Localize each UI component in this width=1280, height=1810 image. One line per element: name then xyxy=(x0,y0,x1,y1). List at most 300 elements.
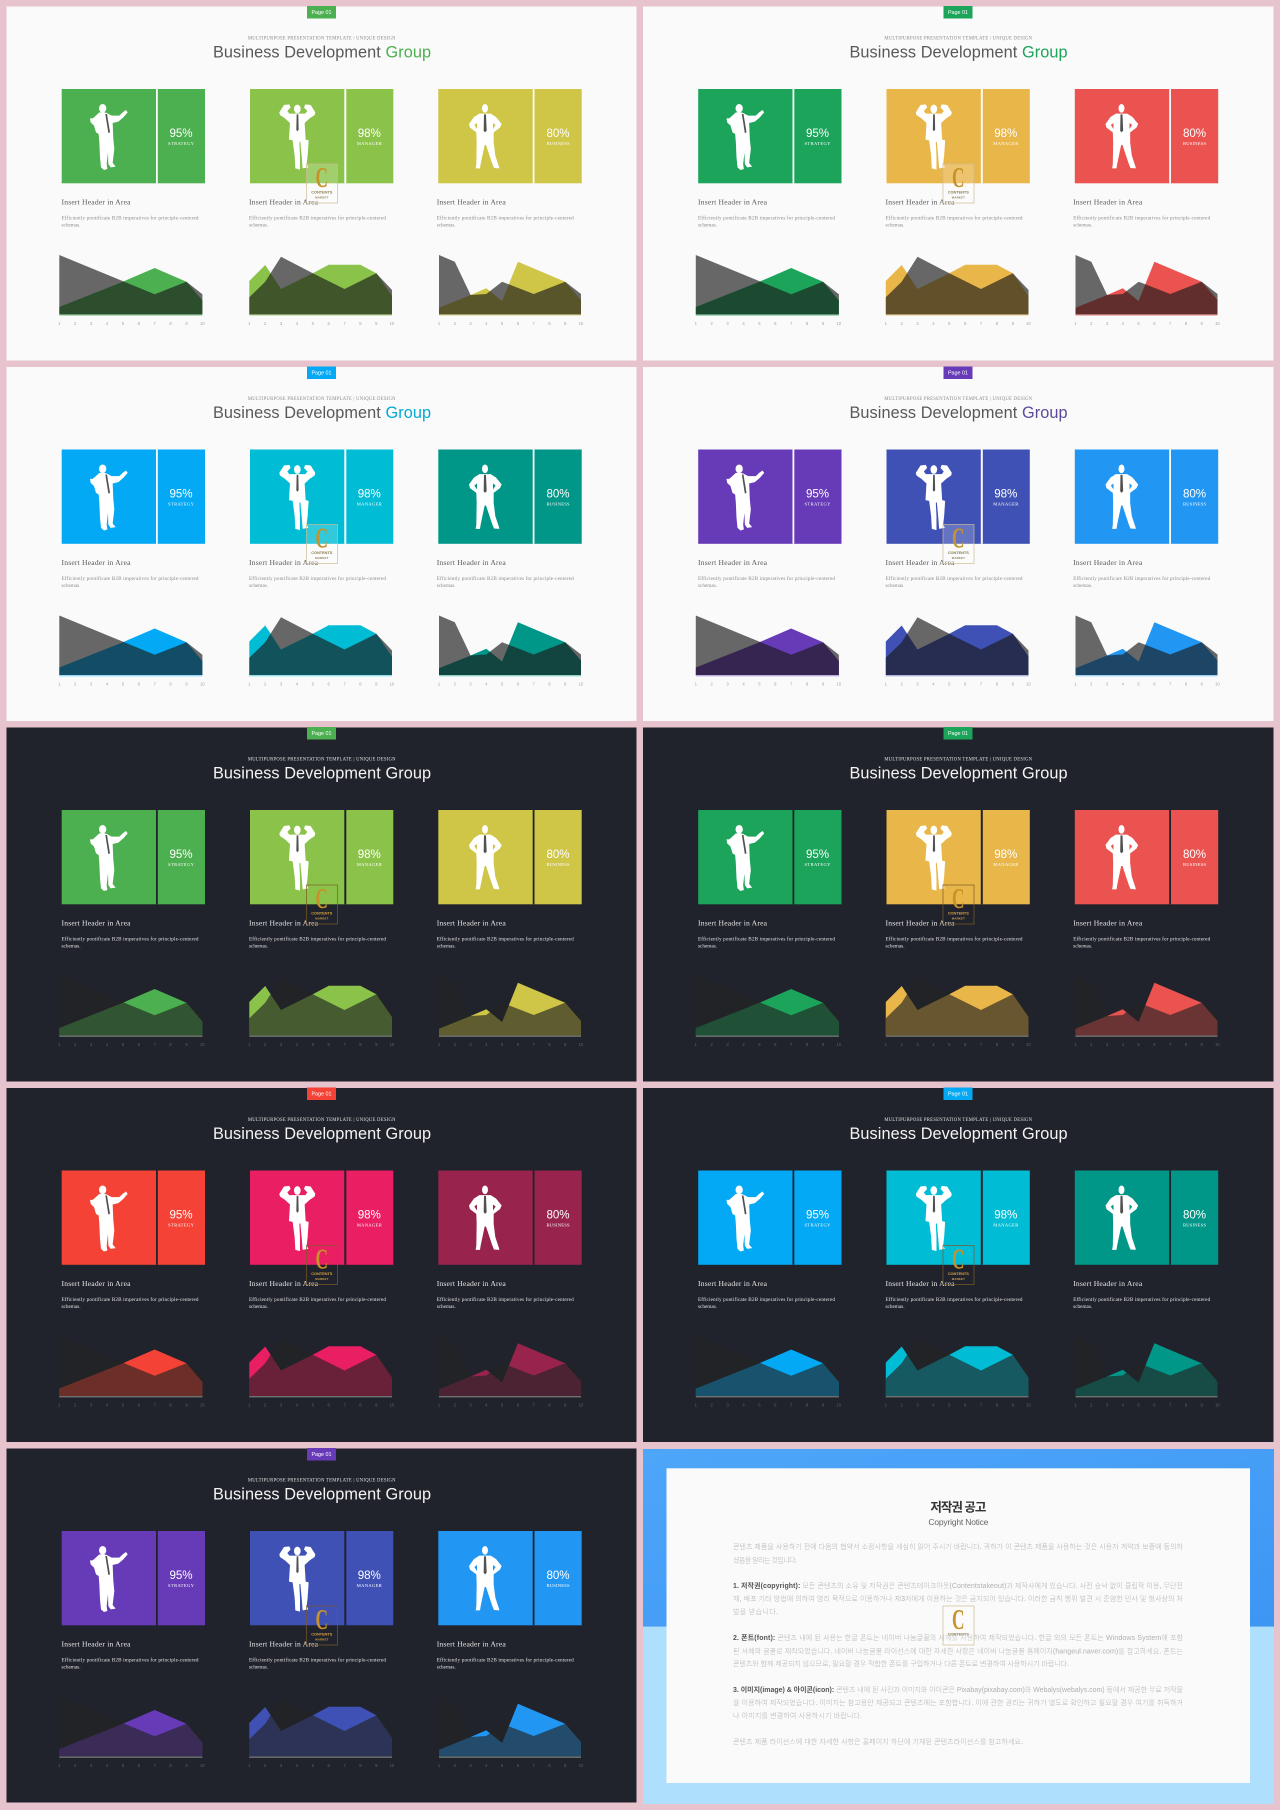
body text xyxy=(886,214,1023,229)
body text: Efficiently pontificate B2B imperatives for principle-centered xyxy=(249,1296,386,1303)
heading: Insert Header in Area xyxy=(437,918,506,928)
notice subheading: Copyright Notice xyxy=(928,1517,989,1527)
card: business: BUSINESS xyxy=(1183,141,1206,146)
card: manager: 98% xyxy=(358,1208,381,1221)
card: manager: 98% xyxy=(994,127,1017,140)
area chart xyxy=(59,1336,202,1397)
notice section: font: 콘텐츠와 함께 제공되지 않으므로, 필요할 경우 적합한 폰트를 구입하거나 다른 폰트로 변경하여 사용하시기 바랍니다. xyxy=(733,1659,1069,1668)
notice footer line: 콘텐츠 제품 라이선스에 대한 자세한 사항은 홈페이지 하단에 기재된 콘텐츠라이선스를 참고하세요. xyxy=(733,1737,1023,1746)
heading: Insert Header in Area xyxy=(437,198,506,206)
axis labels: 12345678910 xyxy=(248,321,395,326)
card: manager xyxy=(250,1531,393,1625)
area chart xyxy=(59,255,202,316)
area chart xyxy=(439,1336,581,1397)
card: business: 80% xyxy=(546,127,570,140)
panel: light emerald xyxy=(643,6,1274,360)
body text xyxy=(886,575,1023,589)
body text: Efficiently pontificate B2B imperatives for principle-centered xyxy=(886,936,1023,942)
column: strategy xyxy=(58,810,205,1047)
card: strategy: STRATEGY xyxy=(168,141,195,146)
card: business: 80% xyxy=(546,487,570,500)
title: Business Development Group xyxy=(213,1125,431,1143)
axis labels: 12345678910 xyxy=(1074,1042,1220,1047)
body text xyxy=(62,214,199,229)
area chart xyxy=(59,976,202,1037)
column: business xyxy=(437,1170,584,1408)
axis labels: 12345678910 xyxy=(695,1402,842,1408)
card: manager xyxy=(886,450,1030,544)
body text xyxy=(62,575,199,589)
column: strategy xyxy=(695,450,842,686)
title: Business Development Group xyxy=(850,43,1068,61)
area chart xyxy=(59,616,202,676)
body text: Efficiently pontificate B2B imperatives for principle-centered xyxy=(62,1656,199,1664)
card: strategy: 95% xyxy=(806,1208,829,1221)
subtitle: MULTIPURPOSE PRESENTATION TEMPLATE | UNIQUE DESIGN xyxy=(884,1118,1033,1123)
body text: schemas. xyxy=(698,1304,717,1310)
heading: Insert Header in Area xyxy=(249,198,319,206)
watermark: C xyxy=(952,1244,965,1276)
card: business xyxy=(438,810,582,904)
column: business xyxy=(437,1531,584,1768)
column: manager xyxy=(885,89,1031,326)
column: strategy xyxy=(58,89,205,326)
watermark xyxy=(943,162,974,203)
area chart xyxy=(439,255,581,316)
body text: Efficiently pontificate B2B imperatives for principle-centered xyxy=(886,1296,1023,1303)
body text: schemas. xyxy=(62,1304,80,1310)
notice section: image and icon xyxy=(733,1685,1184,1720)
card: business: BUSINESS xyxy=(546,1583,570,1588)
panel: light green xyxy=(6,6,636,360)
body text: Efficiently pontificate B2B imperatives for principle-centered xyxy=(437,575,574,582)
watermark: C xyxy=(952,1604,965,1636)
card: manager: 98% xyxy=(358,1569,381,1582)
body text: Efficiently pontificate B2B imperatives for principle-centered xyxy=(62,1296,199,1303)
card: strategy: STRATEGY xyxy=(168,1222,195,1228)
area chart xyxy=(1076,1336,1218,1397)
watermark xyxy=(306,162,338,203)
body text xyxy=(886,1296,1023,1310)
area chart xyxy=(249,978,392,1037)
axis labels: 12345678910 xyxy=(248,682,395,686)
card: business xyxy=(1075,810,1218,904)
column: manager xyxy=(885,450,1031,686)
body text: schemas. xyxy=(249,1665,268,1671)
card: business xyxy=(438,450,582,544)
body text xyxy=(437,575,574,589)
body text: Efficiently pontificate B2B imperatives for principle-centered xyxy=(249,1656,386,1664)
subtitle: MULTIPURPOSE PRESENTATION TEMPLATE | UNIQUE DESIGN xyxy=(248,1479,396,1484)
page badge xyxy=(944,727,972,740)
body text xyxy=(437,936,574,950)
watermark: CONTENTS xyxy=(311,1632,333,1636)
notice section: font: 2. 폰트(font): 콘텐츠 내에 된 사용는 한글 폰트는 네이버 나눔글꼴의 서체를 사용하여 제작되었습니다. 한글 외의 모든 폰트는 Windows System에 포함 xyxy=(733,1633,1184,1642)
heading: Insert Header in Area xyxy=(62,558,131,567)
title: Business Development Group xyxy=(850,764,1068,782)
body text: Efficiently pontificate B2B imperatives for principle-centered xyxy=(437,214,574,222)
column: manager xyxy=(248,1170,395,1408)
card: strategy: STRATEGY xyxy=(804,141,831,146)
body text: schemas. xyxy=(1073,583,1092,589)
axis labels: 12345678910 xyxy=(885,682,1031,686)
heading: Insert Header in Area xyxy=(698,1279,768,1288)
axis labels: 12345678910 xyxy=(58,1763,205,1768)
body text xyxy=(437,1296,574,1310)
column: strategy xyxy=(695,810,842,1047)
notice intro xyxy=(733,1542,1184,1564)
body text: Efficiently pontificate B2B imperatives for principle-centered xyxy=(437,936,574,942)
body text: Efficiently pontificate B2B imperatives for principle-centered xyxy=(62,214,199,222)
heading: Insert Header in Area xyxy=(886,558,955,567)
body text: Efficiently pontificate B2B imperatives for principle-centered xyxy=(62,575,199,582)
panel: copyright notice xyxy=(643,1449,1274,1804)
body text xyxy=(249,214,386,229)
card: manager: 98% xyxy=(994,487,1017,500)
area chart xyxy=(886,257,1028,316)
heading: Insert Header in Area xyxy=(886,918,955,928)
watermark: C xyxy=(316,162,328,194)
column: business xyxy=(437,89,584,326)
watermark xyxy=(306,883,338,924)
page badge xyxy=(944,6,972,18)
card: manager: MANAGER xyxy=(993,862,1019,867)
page badge xyxy=(307,1448,336,1460)
heading: Insert Header in Area xyxy=(437,1279,506,1288)
card: manager: MANAGER xyxy=(357,141,383,146)
body text: Efficiently pontificate B2B imperatives for principle-centered xyxy=(698,1296,835,1303)
watermark: CONTENTS xyxy=(948,1271,969,1276)
card: business: 80% xyxy=(1183,1208,1206,1221)
heading: Insert Header in Area xyxy=(62,1640,131,1648)
card: strategy: STRATEGY xyxy=(168,502,195,506)
axis labels: 12345678910 xyxy=(438,682,584,686)
card: manager: 98% xyxy=(358,127,381,140)
page badge: Page 01 xyxy=(948,370,968,376)
panel: light purple xyxy=(643,366,1274,721)
heading: Insert Header in Area xyxy=(437,1640,506,1648)
page badge: Page 01 xyxy=(311,1452,332,1458)
notice intro: 콘텐츠 제품을 사용하기 전에 다음의 협약서 소정사항을 세심히 읽어 주시기 바랍니다. 귀하가 이 콘텐츠 제품을 사용하는 것은 사용자 계약과 보증에 동의하 xyxy=(733,1542,1184,1551)
body text xyxy=(249,1656,386,1671)
body text: Efficiently pontificate B2B imperatives for principle-centered xyxy=(62,936,199,942)
subtitle: MULTIPURPOSE PRESENTATION TEMPLATE | UNIQUE DESIGN xyxy=(248,37,396,42)
heading: Insert Header in Area xyxy=(698,918,768,928)
heading: Insert Header in Area xyxy=(1073,558,1143,567)
column: business xyxy=(1073,1170,1220,1408)
card: business: 80% xyxy=(546,848,570,861)
card: manager xyxy=(250,450,393,544)
card: manager xyxy=(250,1170,393,1265)
body text: schemas. xyxy=(1073,944,1092,950)
panel: dark emerald xyxy=(643,727,1274,1082)
card: business: BUSINESS xyxy=(546,862,570,867)
watermark xyxy=(943,522,974,564)
body text: Efficiently pontificate B2B imperatives for principle-centered xyxy=(698,936,835,942)
title: Business Development Group xyxy=(213,43,431,61)
watermark: C xyxy=(316,883,328,915)
watermark xyxy=(943,1604,974,1645)
body text: schemas. xyxy=(886,944,904,950)
column: strategy xyxy=(695,89,842,326)
card: business xyxy=(438,1531,582,1625)
card: business: BUSINESS xyxy=(546,141,570,146)
watermark: C xyxy=(316,1604,328,1636)
watermark xyxy=(306,1604,338,1645)
watermark: MARKET xyxy=(952,556,965,560)
card: manager: MANAGER xyxy=(357,502,383,506)
notice section: image and icon: 3. 이미지(image) & 아이콘(icon): 콘텐츠 내에 된 사진과 이미지와 아이콘은 Pixabay(pixabay.com)와 Webalys(webalys.com) 등에서 제공한 무료 저작물 xyxy=(733,1685,1184,1694)
body text: schemas. xyxy=(1073,1304,1092,1310)
area chart xyxy=(1076,976,1218,1037)
axis labels: 12345678910 xyxy=(1074,1402,1220,1408)
page badge xyxy=(307,1088,336,1100)
axis labels: 12345678910 xyxy=(438,1042,584,1047)
watermark: CONTENTS xyxy=(311,910,333,916)
axis labels: 12345678910 xyxy=(695,321,842,326)
area chart xyxy=(249,1699,392,1758)
card: business xyxy=(1075,1170,1218,1265)
body text: Efficiently pontificate B2B imperatives for principle-centered xyxy=(249,936,386,942)
body text: Efficiently pontificate B2B imperatives for principle-centered xyxy=(698,575,835,582)
column: manager xyxy=(248,1531,395,1768)
card: manager xyxy=(886,810,1030,904)
notice intro: 셨음을 알리는 것입니다. xyxy=(733,1556,797,1564)
heading: Insert Header in Area xyxy=(1073,198,1143,206)
column: business xyxy=(1073,89,1220,326)
card: business xyxy=(1075,89,1218,183)
body text xyxy=(698,575,835,589)
watermark: MARKET xyxy=(952,916,965,920)
body text: schemas. xyxy=(1073,223,1092,229)
axis labels: 12345678910 xyxy=(885,1402,1031,1408)
card: business: BUSINESS xyxy=(1183,862,1206,867)
area chart xyxy=(886,1338,1028,1397)
watermark xyxy=(943,883,974,924)
body text xyxy=(249,936,386,950)
card: strategy xyxy=(62,89,205,183)
card: strategy: 95% xyxy=(170,127,192,140)
body text: Efficiently pontificate B2B imperatives for principle-centered xyxy=(249,214,386,222)
body text: Efficiently pontificate B2B imperatives for principle-centered xyxy=(886,214,1023,222)
watermark: C xyxy=(952,883,965,915)
card: manager: MANAGER xyxy=(993,502,1019,506)
watermark xyxy=(306,522,338,564)
body text xyxy=(698,936,835,950)
body text: schemas. xyxy=(437,583,456,589)
body text: Efficiently pontificate B2B imperatives for principle-centered xyxy=(437,1296,574,1303)
axis labels: 12345678910 xyxy=(438,321,584,326)
notice section: image and icon: 나 이미지를 변경하여 사용하시기 바랍니다. xyxy=(733,1711,862,1720)
notice section: font xyxy=(733,1633,1184,1668)
column: business xyxy=(437,450,584,686)
heading: Insert Header in Area xyxy=(249,558,319,567)
watermark: MARKET xyxy=(315,1638,329,1642)
heading: Insert Header in Area xyxy=(62,1279,131,1288)
area chart xyxy=(696,1336,839,1397)
axis labels: 12345678910 xyxy=(248,1042,395,1047)
body text: schemas. xyxy=(437,1665,456,1671)
subtitle: MULTIPURPOSE PRESENTATION TEMPLATE | UNIQUE DESIGN xyxy=(248,397,396,402)
page badge xyxy=(307,727,336,740)
body text: Efficiently pontificate B2B imperatives for principle-centered xyxy=(249,575,386,582)
title: Business Development Group xyxy=(213,764,431,782)
card: manager: 98% xyxy=(994,1208,1017,1221)
heading: Insert Header in Area xyxy=(886,1279,955,1288)
body text: schemas. xyxy=(698,583,717,589)
card: business: 80% xyxy=(1183,127,1206,140)
watermark: CONTENTS xyxy=(948,910,969,916)
body text xyxy=(886,936,1023,950)
card: strategy: STRATEGY xyxy=(804,1222,831,1228)
area chart xyxy=(696,255,839,316)
axis labels: 12345678910 xyxy=(1074,682,1220,686)
card: business: 80% xyxy=(1183,848,1206,861)
card: strategy: 95% xyxy=(806,848,829,861)
subtitle: MULTIPURPOSE PRESENTATION TEMPLATE | UNIQUE DESIGN xyxy=(884,397,1033,402)
body text xyxy=(1073,936,1211,950)
card: manager: MANAGER xyxy=(993,141,1019,146)
area chart xyxy=(696,976,839,1037)
column: manager xyxy=(248,89,395,326)
watermark: MARKET xyxy=(315,556,329,560)
body text xyxy=(1073,1296,1211,1310)
body text: schemas. xyxy=(62,583,80,589)
notice heading: 저작권 공고 xyxy=(930,1500,986,1514)
card: manager: 98% xyxy=(994,848,1017,861)
card: strategy: 95% xyxy=(170,848,192,861)
area chart xyxy=(886,978,1028,1037)
card: business: BUSINESS xyxy=(1183,502,1206,506)
notice section: copyright: 1. 저작권(copyright): 모든 콘텐츠의 소유 및 저작권은 콘텐츠테이크아웃(Contentstakeout)과 제작사에게 있습니다. 사전 승낙 없이 클립작 이용, 무단전 xyxy=(733,1581,1183,1590)
body text xyxy=(62,1296,199,1310)
column: manager xyxy=(248,450,395,686)
body text: schemas. xyxy=(886,1304,904,1310)
card: business: 80% xyxy=(1183,487,1206,500)
watermark: CONTENTS xyxy=(311,550,333,555)
body text: schemas. xyxy=(886,223,904,229)
watermark xyxy=(306,1244,338,1284)
page badge xyxy=(307,6,336,18)
body text: schemas. xyxy=(249,1304,268,1310)
axis labels: 12345678910 xyxy=(58,1042,205,1047)
heading: Insert Header in Area xyxy=(437,558,506,567)
body text: schemas. xyxy=(437,1304,456,1310)
body text xyxy=(62,936,199,950)
card: strategy xyxy=(698,1170,842,1265)
card: business: BUSINESS xyxy=(1183,1222,1206,1228)
subtitle: MULTIPURPOSE PRESENTATION TEMPLATE | UNIQUE DESIGN xyxy=(884,37,1033,42)
axis labels: 12345678910 xyxy=(58,321,205,326)
heading: Insert Header in Area xyxy=(249,1279,319,1288)
area chart xyxy=(249,1338,392,1397)
body text: schemas. xyxy=(62,223,80,229)
card: business: 80% xyxy=(546,1208,570,1221)
card: strategy: STRATEGY xyxy=(804,862,831,867)
subtitle: MULTIPURPOSE PRESENTATION TEMPLATE | UNIQUE DESIGN xyxy=(884,758,1033,763)
notice section: image and icon: 을 이용하여 제작되었습니다. 이미지는 참고용만 제공되고 콘텐츠에는 포함합니다. 이에 관한 권리는 귀하가 별도로 확인하고 필요할 경우 여기를 취득하거 xyxy=(733,1698,1183,1707)
heading: Insert Header in Area xyxy=(62,918,131,928)
body text xyxy=(1073,214,1211,229)
area chart xyxy=(439,1697,581,1758)
card: business: BUSINESS xyxy=(546,1222,570,1228)
body text xyxy=(1073,575,1211,589)
body text: schemas. xyxy=(437,944,456,950)
body text xyxy=(62,1656,199,1671)
watermark: CONTENTS xyxy=(948,1632,969,1636)
body text xyxy=(698,214,835,229)
heading: Insert Header in Area xyxy=(249,1640,319,1648)
card: manager xyxy=(886,1170,1030,1265)
subtitle: MULTIPURPOSE PRESENTATION TEMPLATE | UNIQUE DESIGN xyxy=(248,1118,396,1123)
page badge: Page 01 xyxy=(311,370,332,376)
card: strategy xyxy=(698,810,842,904)
heading: Insert Header in Area xyxy=(698,198,768,206)
subtitle: MULTIPURPOSE PRESENTATION TEMPLATE | UNIQUE DESIGN xyxy=(248,758,396,763)
area chart xyxy=(886,617,1028,676)
axis labels: 12345678910 xyxy=(438,1402,584,1408)
card: strategy: 95% xyxy=(806,487,829,500)
page badge xyxy=(307,366,336,379)
axis labels: 12345678910 xyxy=(438,1763,584,1768)
panel: dark red xyxy=(6,1088,636,1442)
card: strategy xyxy=(62,1531,205,1625)
body text: schemas. xyxy=(62,944,80,950)
card: manager: MANAGER xyxy=(357,1583,383,1588)
card: manager xyxy=(886,89,1030,183)
axis labels: 12345678910 xyxy=(58,1402,205,1408)
watermark: CONTENTS xyxy=(948,190,969,194)
heading: Insert Header in Area xyxy=(62,198,131,206)
card: manager: 98% xyxy=(358,848,381,861)
axis labels: 12345678910 xyxy=(695,682,842,686)
panel: light blue xyxy=(6,366,636,721)
card: strategy xyxy=(62,810,205,904)
card: strategy: STRATEGY xyxy=(804,502,831,506)
column: business xyxy=(1073,450,1220,686)
card: manager: MANAGER xyxy=(357,862,383,867)
column: manager xyxy=(885,810,1031,1047)
watermark: MARKET xyxy=(315,196,329,200)
body text xyxy=(437,1656,574,1671)
column: manager xyxy=(248,810,395,1047)
card: manager: MANAGER xyxy=(357,1222,383,1228)
area chart xyxy=(249,617,392,676)
body text: schemas. xyxy=(698,944,717,950)
column: business xyxy=(437,810,584,1047)
heading: Insert Header in Area xyxy=(698,558,768,567)
heading: Insert Header in Area xyxy=(1073,1279,1143,1288)
watermark: C xyxy=(316,522,328,554)
watermark: MARKET xyxy=(952,1277,965,1281)
body text: Efficiently pontificate B2B imperatives for principle-centered xyxy=(698,214,835,222)
card: strategy: 95% xyxy=(170,487,192,500)
body text: schemas. xyxy=(437,223,456,229)
page badge: Page 01 xyxy=(948,1092,968,1098)
body text xyxy=(249,575,386,589)
card: strategy xyxy=(62,1170,205,1265)
card: strategy: STRATEGY xyxy=(168,862,195,867)
column: strategy xyxy=(58,450,205,686)
area chart xyxy=(1076,616,1218,676)
card: strategy: 95% xyxy=(806,127,829,140)
area chart xyxy=(439,616,581,676)
card: business: 80% xyxy=(546,1569,570,1582)
body text: Efficiently pontificate B2B imperatives for principle-centered xyxy=(1073,575,1211,582)
page badge: Page 01 xyxy=(311,731,332,737)
page badge: Page 01 xyxy=(311,10,332,16)
column: strategy xyxy=(58,1170,205,1408)
